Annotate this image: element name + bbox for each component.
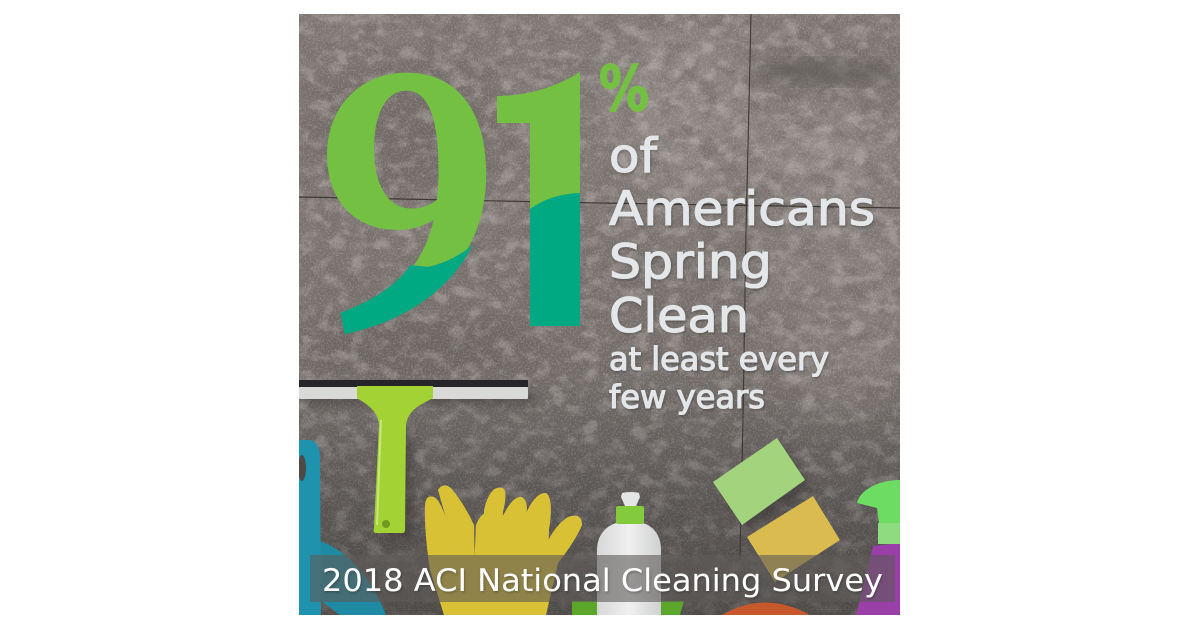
line: at least every: at least every — [609, 340, 829, 378]
icon: squeegee — [299, 380, 528, 533]
big number 91 — [327, 72, 580, 334]
percent sign: % — [599, 52, 649, 125]
icon: orange bowl — [722, 602, 810, 615]
icon: white bottle — [597, 492, 661, 615]
icon: green tub — [572, 601, 684, 615]
background: concrete tile wall — [299, 14, 920, 615]
line: few years: few years — [609, 378, 765, 416]
line: Clean: Clean — [609, 289, 749, 344]
line: of: of — [609, 129, 659, 184]
cleaning supplies — [298, 380, 902, 615]
headline text — [609, 129, 875, 416]
icon: yellow sponge — [747, 496, 840, 582]
icon: yellow gloves — [425, 485, 582, 615]
caption: survey name: 2018 ACI National Cleaning Survey — [322, 563, 883, 599]
icon: blue dustpan — [298, 440, 386, 615]
infographic — [299, 14, 900, 615]
icon: green sponge — [713, 438, 805, 525]
caption band — [310, 555, 895, 602]
icon: spray bottle — [856, 480, 902, 615]
item shadows — [305, 388, 812, 538]
line: Americans: Americans — [609, 182, 875, 237]
line: Spring: Spring — [609, 235, 772, 290]
